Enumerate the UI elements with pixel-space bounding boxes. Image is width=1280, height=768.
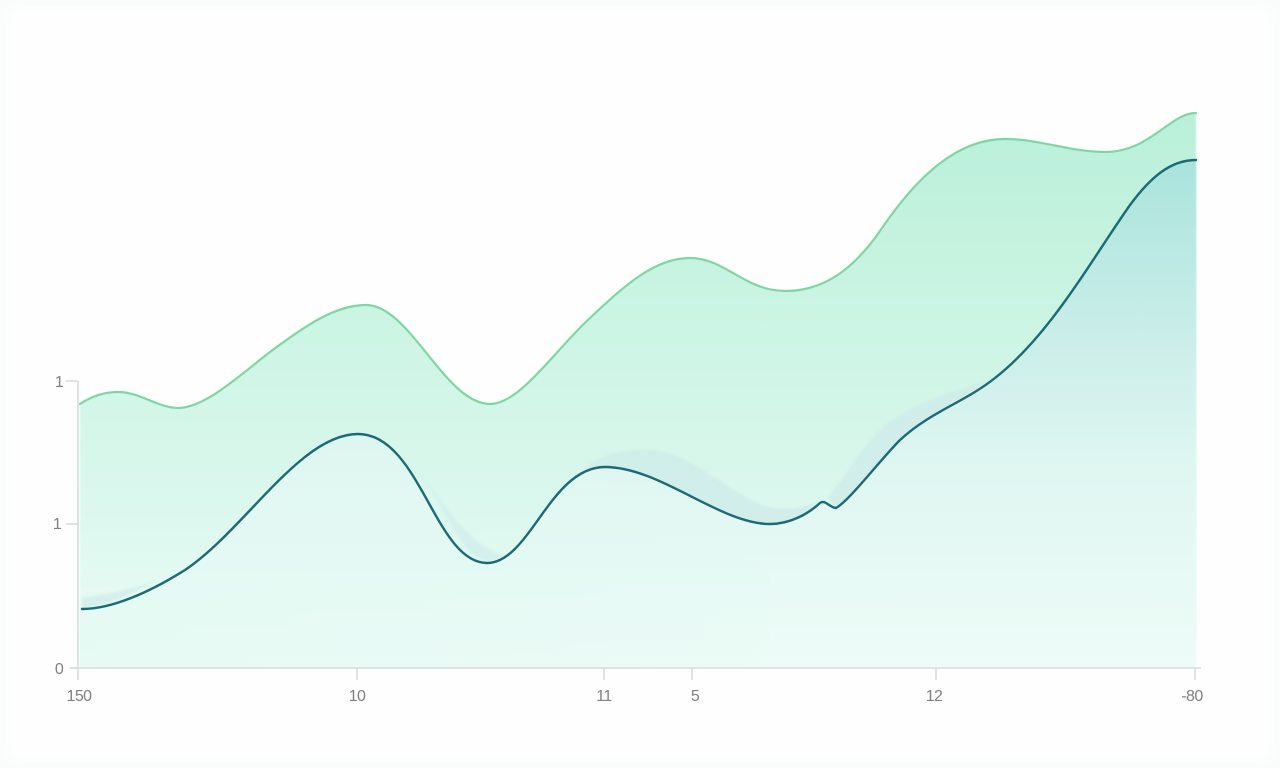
x axis labels: -80 <box>1181 688 1203 705</box>
x axis labels: 150 <box>67 688 92 705</box>
y axis labels <box>53 374 64 678</box>
x axis labels <box>67 688 1203 705</box>
y axis labels: 0 <box>55 661 64 678</box>
lower teal area <box>80 160 1196 668</box>
shaded bands above teal line <box>82 380 992 608</box>
x axis labels: 12 <box>926 688 943 705</box>
upper green area <box>80 113 1196 668</box>
x axis labels: 10 <box>349 688 366 705</box>
x axis labels: 11 <box>596 688 612 705</box>
green line <box>80 113 1196 408</box>
y axis labels: 1 <box>55 374 64 391</box>
left side blend of lower area <box>80 434 770 668</box>
y axis <box>66 381 78 680</box>
y axis labels: 1 <box>53 516 62 533</box>
x axis <box>70 668 1201 680</box>
teal line <box>82 160 1196 609</box>
x axis labels: 5 <box>691 688 700 705</box>
